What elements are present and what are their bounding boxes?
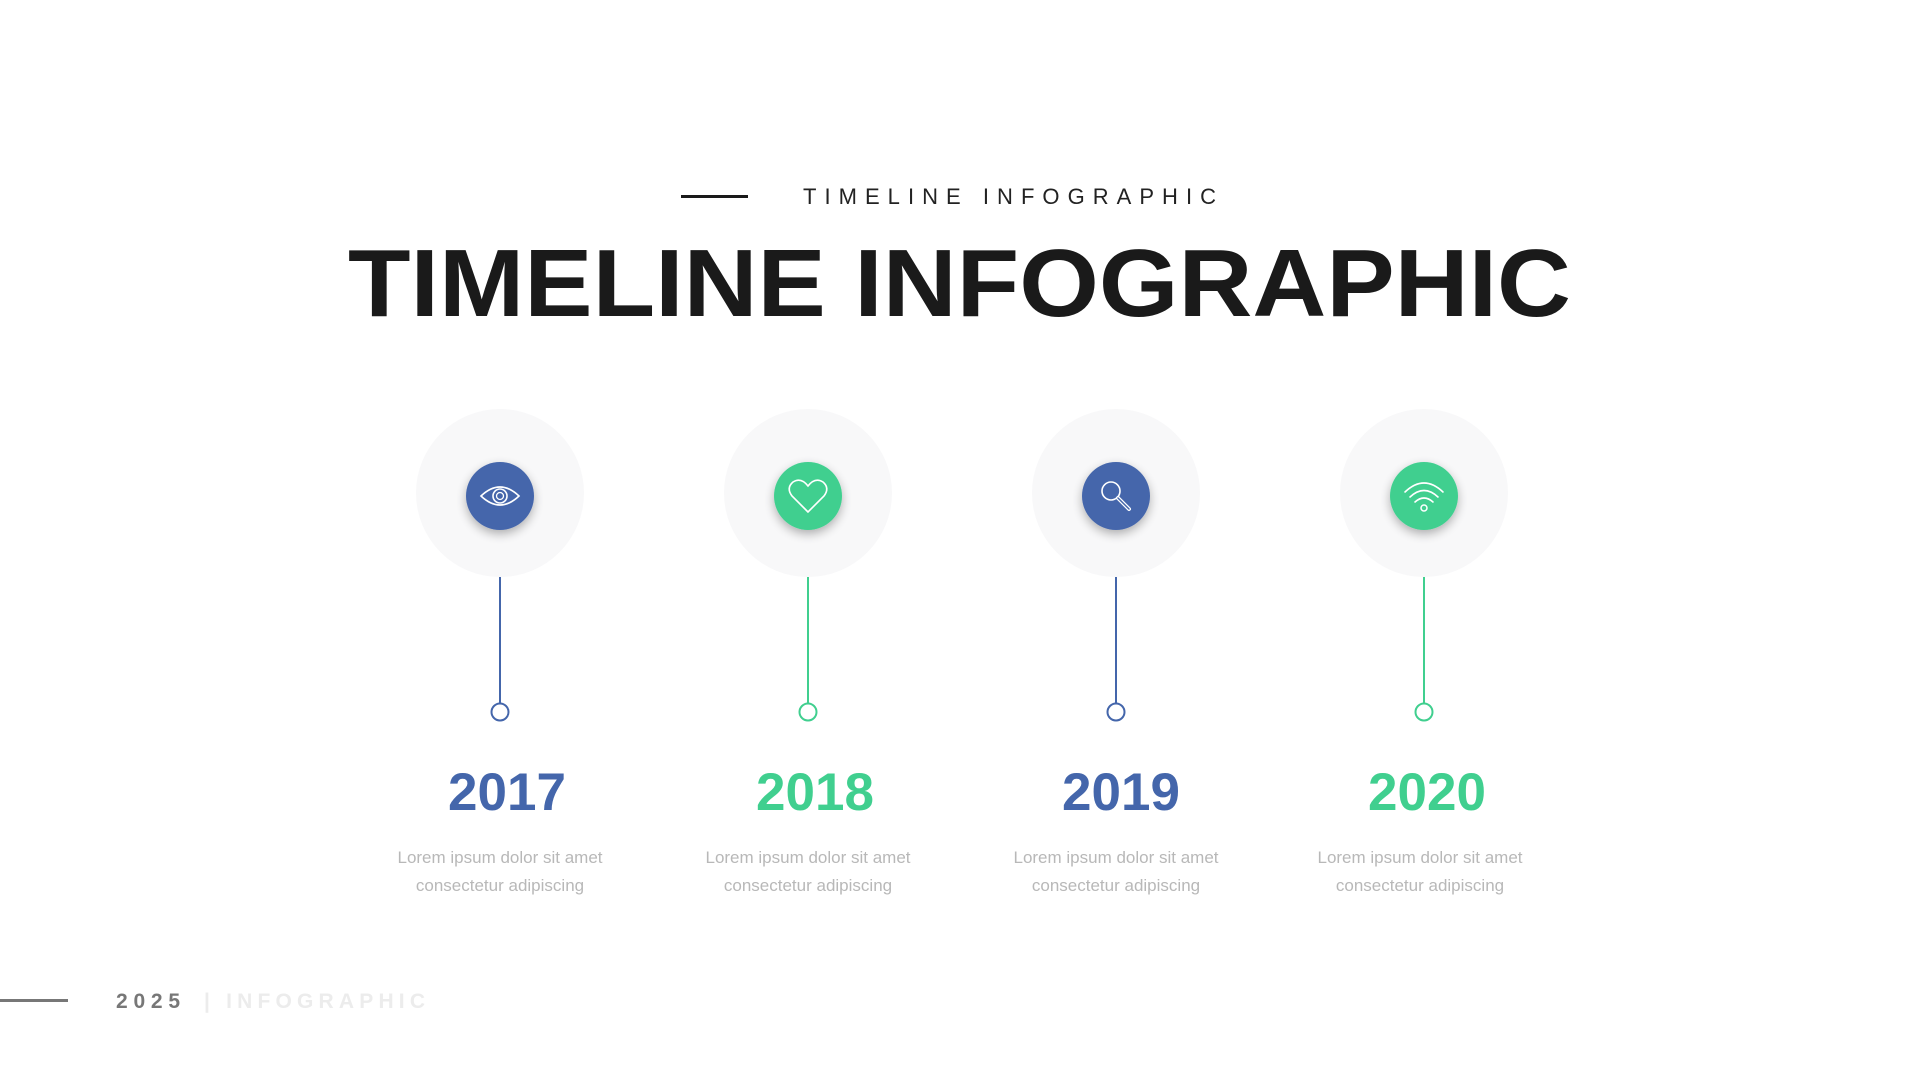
timeline item: 2019: Lorem ipsum dolor sit amet bbox=[1013, 848, 1219, 867]
timeline item: 2017: Lorem ipsum dolor sit amet bbox=[397, 848, 603, 867]
title: TIMELINE INFOGRAPHIC bbox=[348, 230, 1571, 337]
icon: search bbox=[1082, 462, 1150, 530]
subtitle: TIMELINE INFOGRAPHIC bbox=[803, 184, 1216, 209]
timeline item: 2018: Lorem ipsum dolor sit amet bbox=[705, 848, 911, 867]
timeline item: 2018 bbox=[705, 409, 911, 895]
timeline item: 2020: 2020 bbox=[1368, 763, 1486, 822]
timeline item: 2017 bbox=[397, 409, 603, 895]
timeline item: 2019: 2019 bbox=[1062, 763, 1180, 822]
icon: eye bbox=[466, 462, 534, 530]
timeline item: 2017: consectetur adipiscing bbox=[416, 876, 584, 895]
timeline item: 2019: consectetur adipiscing bbox=[1032, 876, 1200, 895]
timeline item: 2020 bbox=[1317, 409, 1523, 895]
timeline item: 2017: 2017 bbox=[448, 763, 566, 822]
icon: heart bbox=[774, 462, 842, 530]
footer bbox=[0, 990, 425, 1013]
footer: 2025 bbox=[116, 990, 180, 1013]
icon: wifi bbox=[1390, 462, 1458, 530]
timeline item: 2018: 2018 bbox=[756, 763, 874, 822]
timeline item: 2020: consectetur adipiscing bbox=[1336, 876, 1504, 895]
timeline item: 2019 bbox=[1013, 409, 1219, 895]
timeline item: 2020: Lorem ipsum dolor sit amet bbox=[1317, 848, 1523, 867]
footer: | INFOGRAPHIC bbox=[204, 990, 425, 1013]
timeline item: 2018: consectetur adipiscing bbox=[724, 876, 892, 895]
